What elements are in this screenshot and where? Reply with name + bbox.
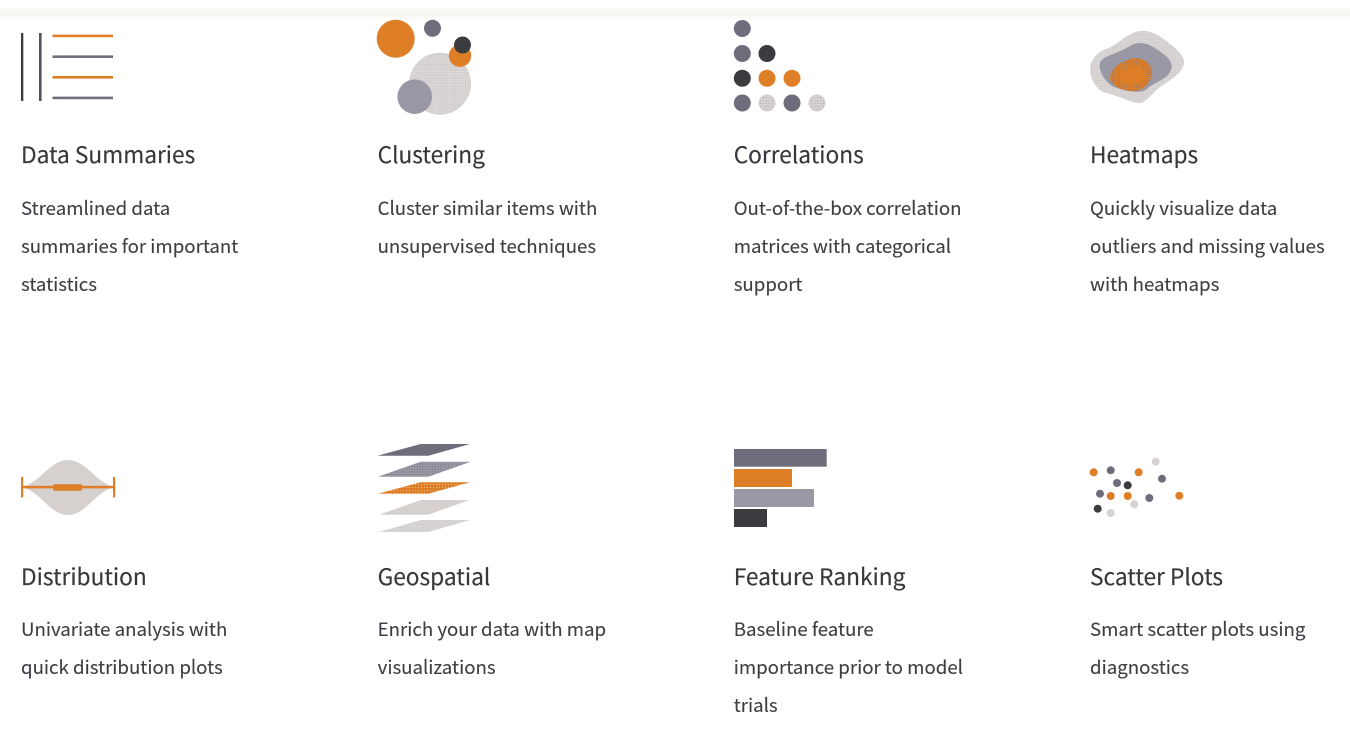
panel: Geospatial bbox=[378, 444, 606, 680]
panel: Heatmaps bbox=[1090, 30, 1325, 297]
text block: Out-of-the-box correlation bbox=[734, 194, 962, 221]
text block: Cluster similar items with bbox=[378, 194, 597, 221]
text block bbox=[734, 194, 962, 297]
text block: Univariate analysis with bbox=[21, 615, 227, 642]
panel: Feature Ranking bbox=[734, 449, 963, 718]
heading: Heatmaps bbox=[1090, 137, 1198, 170]
text block bbox=[1090, 615, 1306, 680]
text block: quick distribution plots bbox=[21, 653, 223, 680]
panel: Correlations bbox=[734, 20, 962, 297]
text block: Enrich your data with map bbox=[378, 615, 606, 642]
text block: visualizations bbox=[378, 653, 496, 680]
text block: Streamlined data bbox=[21, 194, 170, 221]
icon: data summary lines bbox=[21, 33, 113, 101]
panel: Clustering bbox=[376, 20, 597, 259]
heading: Geospatial bbox=[378, 559, 490, 592]
icon: heatmap contours bbox=[1090, 30, 1184, 104]
icon: correlation matrix dots bbox=[734, 20, 826, 112]
heading: Clustering bbox=[378, 137, 485, 170]
text block: Smart scatter plots using bbox=[1090, 615, 1305, 642]
text block: with heatmaps bbox=[1090, 270, 1219, 297]
panel: Data Summaries bbox=[21, 33, 238, 297]
text block: statistics bbox=[21, 270, 97, 297]
heading: Data Summaries bbox=[21, 137, 195, 170]
text block: unsupervised techniques bbox=[378, 232, 596, 259]
text block: importance prior to model bbox=[734, 653, 963, 680]
text block bbox=[1090, 194, 1325, 297]
text block: diagnostics bbox=[1090, 653, 1189, 680]
panel: Distribution bbox=[21, 460, 227, 680]
text block: support bbox=[734, 270, 802, 297]
text block: Quickly visualize data bbox=[1090, 194, 1277, 221]
icon: clusters of circles bbox=[376, 20, 472, 115]
text block: matrices with categorical bbox=[734, 232, 951, 259]
icon: stacked map layers bbox=[378, 444, 470, 532]
heading: Correlations bbox=[734, 137, 864, 170]
text block: Baseline feature bbox=[734, 615, 874, 642]
text block bbox=[378, 615, 606, 680]
text block: trials bbox=[734, 691, 778, 718]
panel: Scatter Plots bbox=[1090, 458, 1306, 680]
icon: violin plot bbox=[21, 460, 116, 515]
icon: scatter plot dots bbox=[1090, 458, 1184, 517]
heading: Feature Ranking bbox=[734, 559, 905, 592]
text block bbox=[734, 615, 963, 718]
text block bbox=[21, 194, 238, 297]
icon: ranked bars bbox=[734, 449, 827, 527]
text block bbox=[21, 615, 227, 680]
heading: Distribution bbox=[21, 559, 147, 592]
text block bbox=[378, 194, 597, 259]
heading: Scatter Plots bbox=[1090, 559, 1223, 592]
text block: summaries for important bbox=[21, 232, 238, 259]
text block: outliers and missing values bbox=[1090, 232, 1325, 259]
